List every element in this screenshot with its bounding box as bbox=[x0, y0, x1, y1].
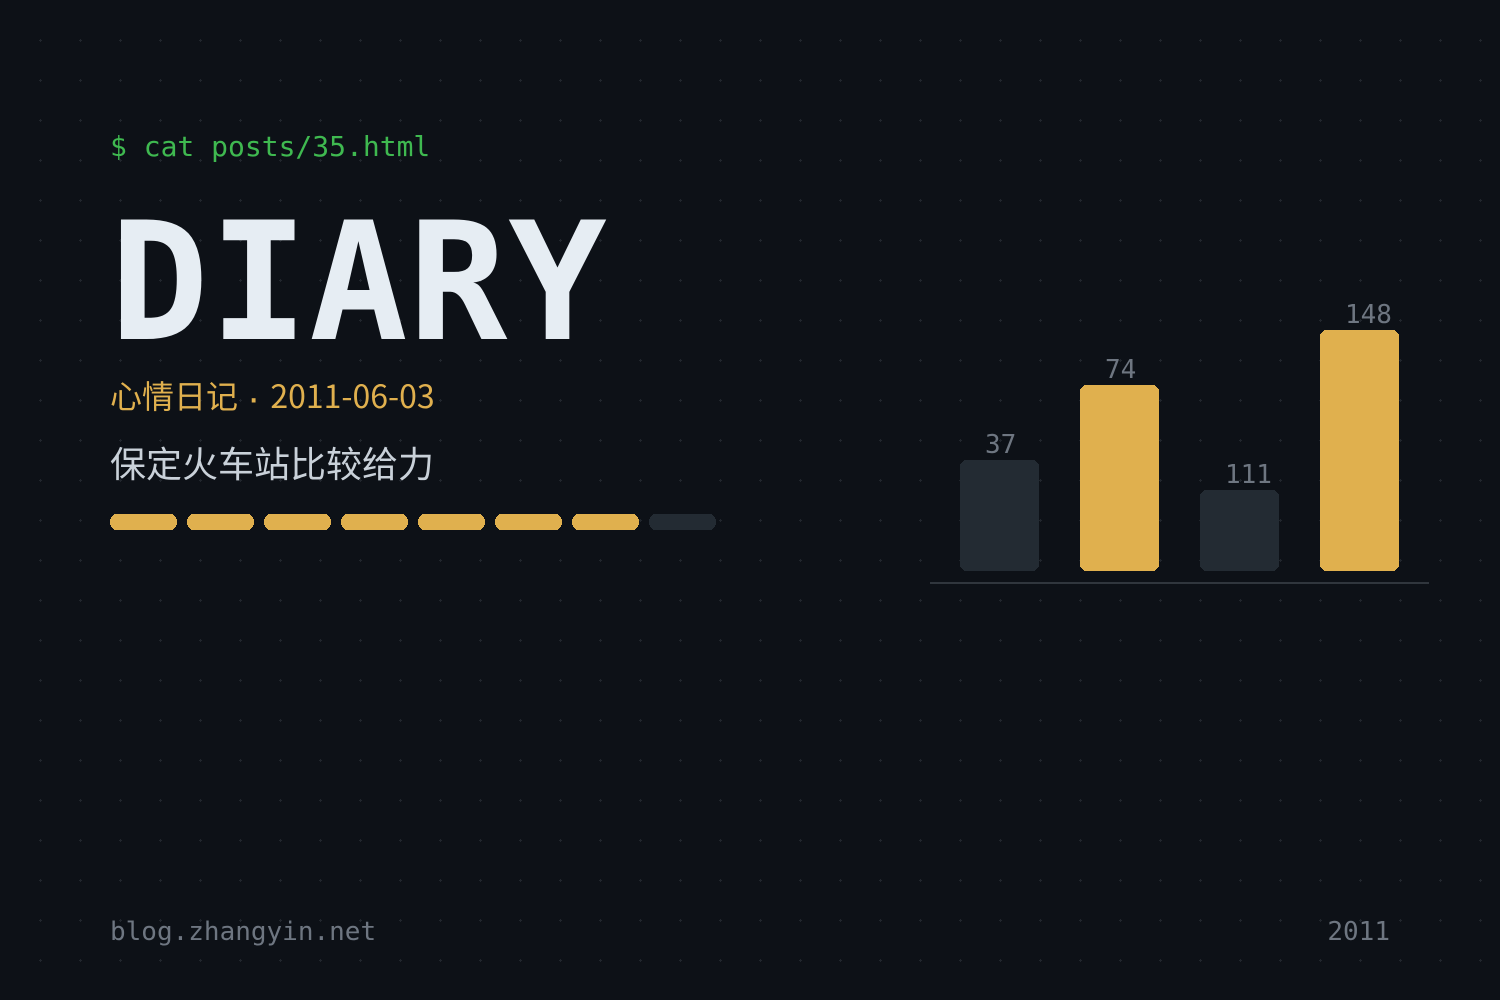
chart baseline bbox=[930, 582, 1429, 584]
bar: 111: 111 bbox=[1225, 460, 1272, 490]
bar: 74 bbox=[1080, 355, 1159, 571]
bar: 74: 74 bbox=[1105, 355, 1136, 385]
bar: 148: 148 bbox=[1345, 300, 1392, 330]
footer: year: 2011 bbox=[1327, 917, 1390, 947]
post headline: 保定火车站比较给力 bbox=[110, 436, 434, 488]
subtitle: category and date: 2011-06-03 bbox=[270, 372, 435, 418]
subtitle: category and date: · bbox=[247, 376, 260, 420]
title: DIARY bbox=[110, 187, 608, 378]
bar: 37: 37 bbox=[985, 430, 1016, 460]
bar chart bbox=[930, 300, 1429, 584]
subtitle: category and date: 心情日记 bbox=[110, 372, 238, 418]
terminal command line: $ cat posts/35.html bbox=[110, 130, 430, 163]
bar: 148 bbox=[1320, 300, 1399, 571]
progress segments bbox=[110, 514, 716, 530]
bar: 111 bbox=[1200, 460, 1279, 571]
footer: site: blog.zhangyin.net bbox=[110, 917, 376, 947]
bar: 37 bbox=[960, 430, 1039, 571]
